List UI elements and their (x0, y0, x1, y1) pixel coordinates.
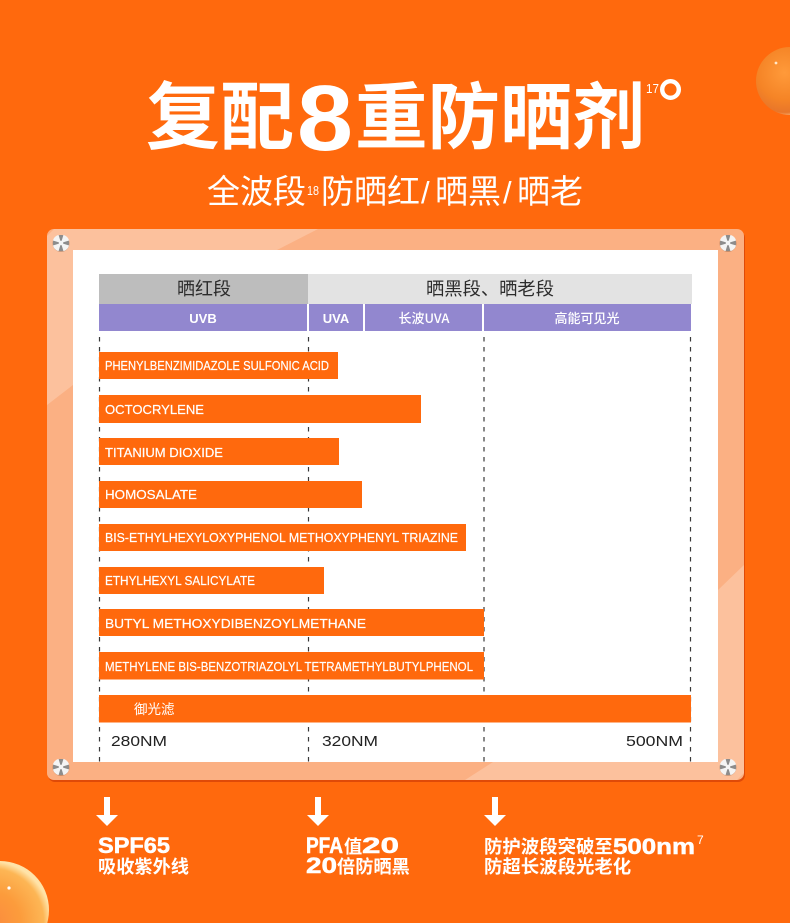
panel: acrylic frame (47, 229, 745, 782)
band label: long UVA: 长波UVA (398, 308, 450, 327)
bar: butyl methoxydibenzoylmethane (99, 609, 484, 636)
bar: bis-ethylhexyloxyphenol methoxyphenyl triazine: BIS-ETHYLHEXYLOXYPHENOL METHOXYPHENYL TRIAZINE (105, 530, 458, 545)
bar: octocrylene (99, 395, 421, 423)
callout: PFA 20: 20 (362, 833, 399, 858)
bar: light filter (99, 695, 691, 722)
icon: screw bottom right (716, 755, 740, 779)
bar: light filter: 御光滤 (134, 698, 175, 718)
subtitle: / (503, 175, 512, 210)
bar: methylene bis-benzotriazolyl tetramethylbutylphenol: METHYLENE BIS-BENZOTRIAZOLYL TETRAMETHYLBUTYLPHENOL (105, 659, 473, 674)
band label: UVA (309, 304, 363, 331)
bar: octocrylene: OCTOCRYLENE (105, 402, 204, 417)
title: 17 (646, 81, 659, 96)
callout: 500nm protection (484, 833, 704, 879)
title: 复配 (146, 58, 294, 165)
icon: screw bottom left (49, 755, 73, 779)
subtitle: 18 (307, 184, 319, 198)
band label: long UVA (365, 304, 482, 331)
callout: PFA 20: 倍防晒黑 (337, 853, 410, 879)
callout: SPF65: SPF65 (98, 833, 170, 858)
band label: high-energy visible light (484, 304, 691, 331)
header: sunburn band: 晒红段 (177, 275, 231, 301)
header: tanning and ageing band: 晒黑段、晒老段 (426, 275, 554, 301)
icon: screw top left (47, 229, 75, 257)
title: 8 (297, 66, 353, 170)
bar: ethylhexyl salicylate (99, 567, 324, 594)
subtitle: 防晒红 (321, 165, 420, 213)
callout: 500nm protection: 7 (697, 833, 704, 847)
bar: phenylbenzimidazole sulfonic acid (99, 352, 338, 379)
bar: homosalate (99, 481, 362, 508)
callout: 500nm protection: 防超长波段光老化 (484, 853, 631, 879)
title: 重防晒剂 (355, 59, 645, 164)
bar: ethylhexyl salicylate: ETHYLHEXYL SALICYLATE (105, 573, 255, 588)
bar: titanium dioxide (99, 438, 339, 465)
title (146, 58, 679, 170)
band label: UVA: UVA (323, 311, 350, 326)
band label: UVB: UVB (189, 311, 217, 326)
chart: UV spectrum coverage (99, 274, 692, 762)
subtitle: 全波段 (207, 165, 306, 213)
icon: screw top right (716, 231, 740, 255)
arrow: SPF column (96, 797, 118, 826)
axis label: 320NM: 320NM (322, 733, 378, 750)
subtitle: 晒黑 (435, 165, 501, 213)
band label: high-energy visible light: 高能可见光 (554, 308, 620, 327)
axis label: 280NM: 280NM (111, 733, 167, 750)
axis label: 500NM: 500NM (626, 733, 683, 750)
callout: PFA 20 (306, 833, 410, 879)
band guide lines (100, 337, 690, 762)
bar: butyl methoxydibenzoylmethane: BUTYL METHOXYDIBENZOYLMETHANE (105, 616, 366, 631)
decorative orange sphere top right (756, 47, 790, 115)
callout: SPF65: 吸收紫外线 (98, 853, 189, 879)
bar: homosalate: HOMOSALATE (105, 487, 197, 502)
callout: 500nm protection: 防护波段突破至 (484, 833, 613, 859)
arrow: 500nm column (484, 797, 506, 826)
bar: titanium dioxide: TITANIUM DIOXIDE (105, 445, 223, 460)
bar: phenylbenzimidazole sulfonic acid: PHENYLBENZIMIDAZOLE SULFONIC ACID (105, 358, 329, 373)
subtitle: 晒老 (517, 165, 583, 213)
decorative orange sphere bottom left (0, 861, 49, 923)
callout: 500nm protection: 500nm (613, 834, 695, 859)
callout: PFA 20: PFA (306, 833, 343, 858)
arrow: PFA column (307, 797, 329, 826)
band label: UVB (99, 304, 307, 331)
bar: methylene bis-benzotriazolyl tetramethylbutylphenol (99, 652, 484, 680)
bar: bis-ethylhexyloxyphenol methoxyphenyl triazine (99, 524, 466, 551)
subtitle: / (421, 175, 430, 210)
header: tanning and ageing band (308, 274, 692, 304)
header: sunburn band (99, 274, 308, 304)
callout: SPF65 (98, 833, 189, 879)
callout: PFA 20: 值 (344, 833, 362, 859)
subtitle (207, 165, 583, 213)
callout: PFA 20: 20 (306, 853, 337, 878)
